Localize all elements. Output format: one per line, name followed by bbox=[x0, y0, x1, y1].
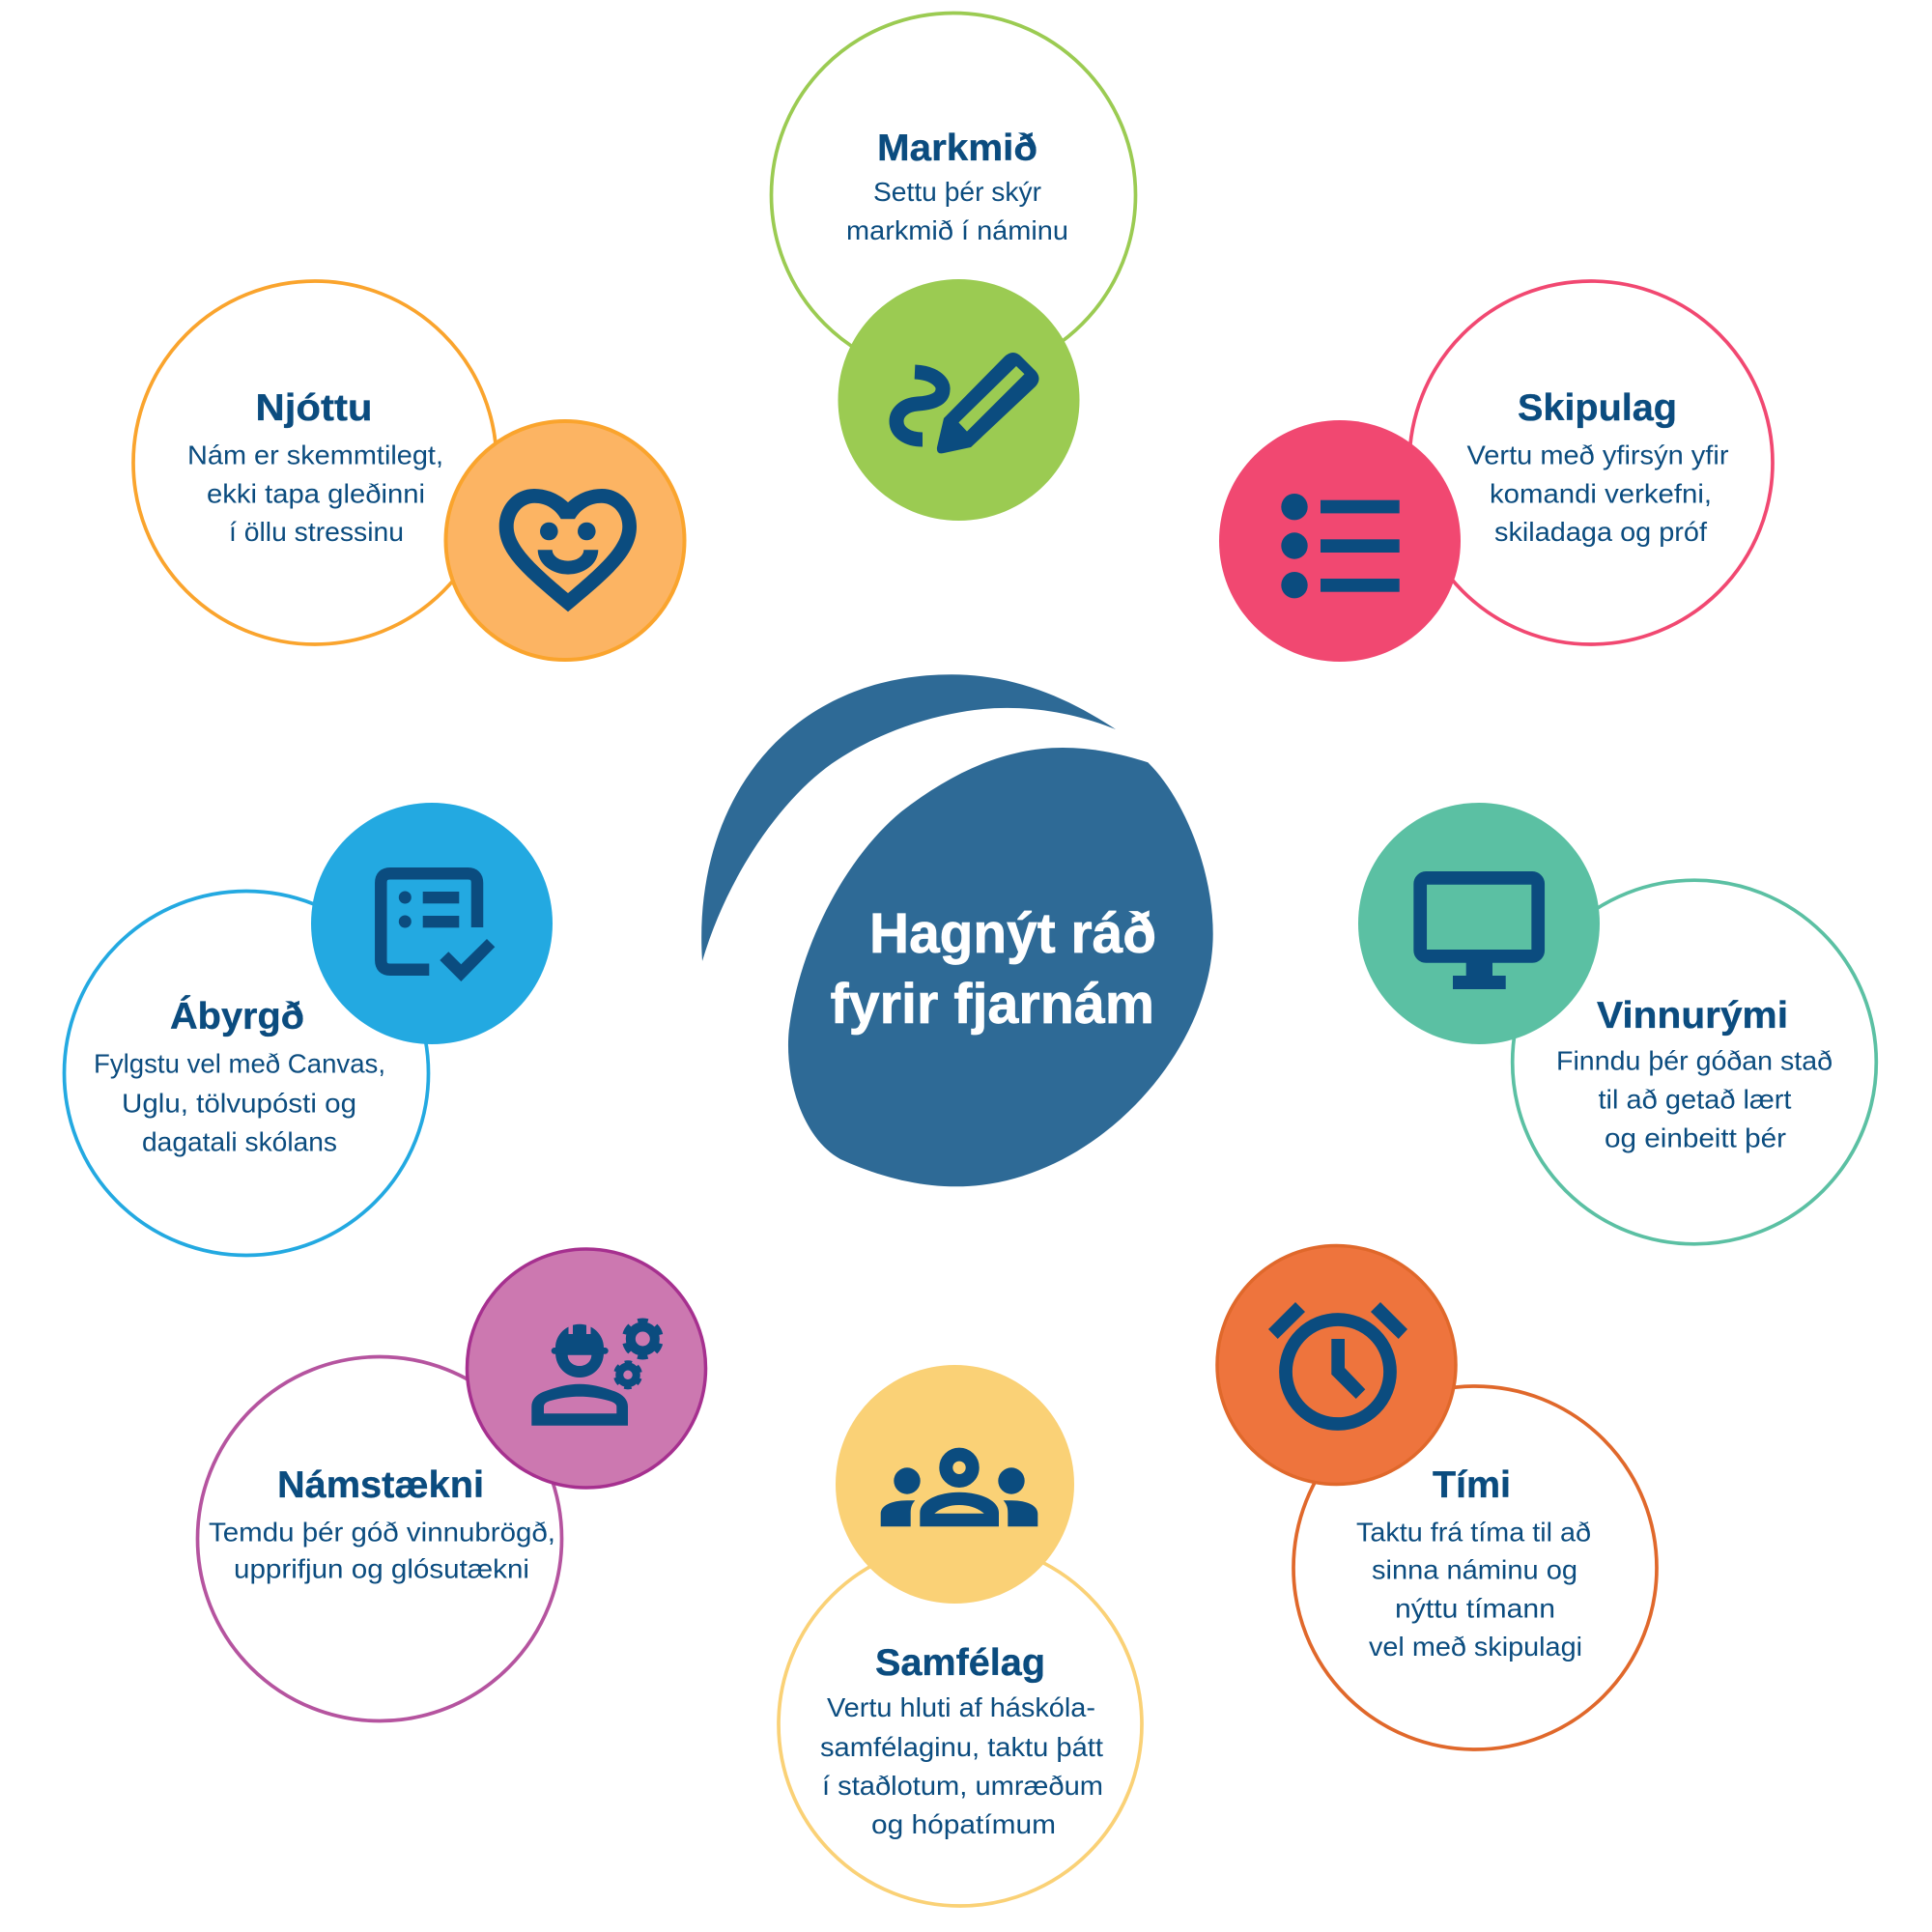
heading: Vinnurými: Vinnurými bbox=[1597, 995, 1788, 1037]
panel: Markmið bbox=[771, 14, 1136, 521]
text block: Samfélag: og hópatímum bbox=[871, 1809, 1056, 1839]
text block: Njóttu bbox=[187, 440, 443, 547]
heading: Tími: Tími bbox=[1433, 1464, 1511, 1506]
outline ring: Njóttu bbox=[133, 281, 497, 644]
text block: Vinnurými: og einbeitt þér bbox=[1605, 1122, 1786, 1153]
text block: Markmið bbox=[846, 177, 1068, 245]
text block: Skipulag: skiladaga og próf bbox=[1494, 517, 1707, 547]
text block: Tími bbox=[1356, 1517, 1591, 1662]
icon: alarm clock bbox=[1268, 1302, 1407, 1424]
panel: Samfélag bbox=[779, 1365, 1142, 1906]
outline ring: Markmið bbox=[771, 14, 1136, 377]
icon: group of people bbox=[881, 1455, 1037, 1526]
outline ring: Vinnurými bbox=[1513, 880, 1876, 1244]
text block: Njóttu: Nám er skemmtilegt, bbox=[187, 440, 443, 469]
text block: Ábyrgð: Uglu, tölvupósti og bbox=[122, 1088, 356, 1119]
panel: Námstækni bbox=[197, 1249, 705, 1721]
panel: Njóttu bbox=[133, 281, 684, 660]
text block: Námstækni: upprifjun og glósutækni bbox=[234, 1553, 529, 1584]
text block: Námstækni: Temdu þér góð vinnubrögð, bbox=[209, 1517, 555, 1548]
panel: Skipulag bbox=[1219, 281, 1773, 662]
panel: Vinnurými bbox=[1358, 803, 1876, 1244]
central logo and title bbox=[701, 674, 1213, 1186]
text block: Ábyrgð bbox=[94, 1049, 385, 1157]
title: Hagnýt ráð bbox=[869, 902, 1156, 965]
text block: Námstækni bbox=[209, 1517, 555, 1584]
text block: Samfélag: Vertu hluti af háskóla- bbox=[827, 1692, 1095, 1722]
text block: Markmið: Settu þér skýr bbox=[873, 177, 1041, 207]
logo blob bbox=[788, 748, 1213, 1186]
outline ring: Skipulag bbox=[1409, 281, 1773, 644]
heading: Samfélag: Samfélag bbox=[875, 1642, 1045, 1684]
heading: Markmið: Markmið bbox=[877, 128, 1037, 169]
outline ring: Námstækni bbox=[197, 1356, 562, 1721]
panel: Tími bbox=[1217, 1246, 1657, 1749]
heading: Njóttu: Njóttu bbox=[255, 387, 373, 429]
icon: smiling heart bbox=[499, 489, 637, 611]
heading: Námstækni: Námstækni bbox=[277, 1464, 484, 1506]
icon disc: Námstækni bbox=[468, 1249, 705, 1488]
text block: Tími: Taktu frá tíma til að bbox=[1356, 1517, 1591, 1548]
icon disc: Samfélag bbox=[836, 1365, 1074, 1604]
icon disc: Markmið bbox=[838, 279, 1080, 521]
icon disc: Njóttu bbox=[446, 421, 684, 660]
title bbox=[831, 902, 1156, 1036]
text block: Samfélag: samfélaginu, taktu þátt bbox=[820, 1732, 1103, 1762]
icon: checklist bbox=[381, 873, 495, 981]
icon: pencil and squiggle bbox=[896, 353, 1039, 453]
text block: Tími: sinna náminu og bbox=[1372, 1555, 1577, 1584]
text block: Ábyrgð: dagatali skólans bbox=[142, 1126, 337, 1157]
icon disc: Skipulag bbox=[1219, 420, 1461, 662]
text block: Samfélag: í staðlotum, umræðum bbox=[822, 1771, 1103, 1801]
heading: Ábyrgð: Ábyrgð bbox=[170, 995, 304, 1037]
text block: Markmið: markmið í náminu bbox=[846, 215, 1068, 245]
text block: Tími: vel með skipulagi bbox=[1369, 1632, 1582, 1662]
outline ring: Ábyrgð bbox=[64, 891, 429, 1256]
text block: Vinnurými: Finndu þér góðan stað bbox=[1556, 1045, 1833, 1076]
text block: Tími: nýttu tímann bbox=[1395, 1594, 1555, 1623]
icon: list bbox=[1281, 494, 1400, 598]
text block: Skipulag: Vertu með yfirsýn yfir bbox=[1466, 440, 1729, 469]
icon disc: Vinnurými bbox=[1358, 803, 1600, 1044]
logo crescent bbox=[701, 674, 1116, 961]
title: fyrir fjarnám bbox=[831, 973, 1154, 1036]
icon disc: Ábyrgð bbox=[311, 803, 553, 1044]
text block: Njóttu: í öllu stressinu bbox=[229, 517, 404, 547]
icon: worker with gears bbox=[531, 1315, 667, 1426]
text block: Vinnurými: til að getað lært bbox=[1598, 1084, 1792, 1115]
outline ring: Tími bbox=[1293, 1386, 1657, 1749]
icon disc: Tími bbox=[1217, 1246, 1456, 1484]
outline ring: Samfélag bbox=[779, 1543, 1142, 1906]
text block: Vinnurými bbox=[1556, 1045, 1833, 1153]
text block: Skipulag bbox=[1466, 440, 1729, 547]
panel: Ábyrgð bbox=[64, 803, 553, 1256]
text block: Skipulag: komandi verkefni, bbox=[1490, 479, 1712, 508]
icon: monitor bbox=[1420, 878, 1538, 989]
text block: Ábyrgð: Fylgstu vel með Canvas, bbox=[94, 1049, 385, 1078]
text block: Njóttu: ekki tapa gleðinni bbox=[207, 479, 425, 508]
text block: Samfélag bbox=[820, 1692, 1103, 1839]
heading: Skipulag: Skipulag bbox=[1518, 387, 1677, 429]
